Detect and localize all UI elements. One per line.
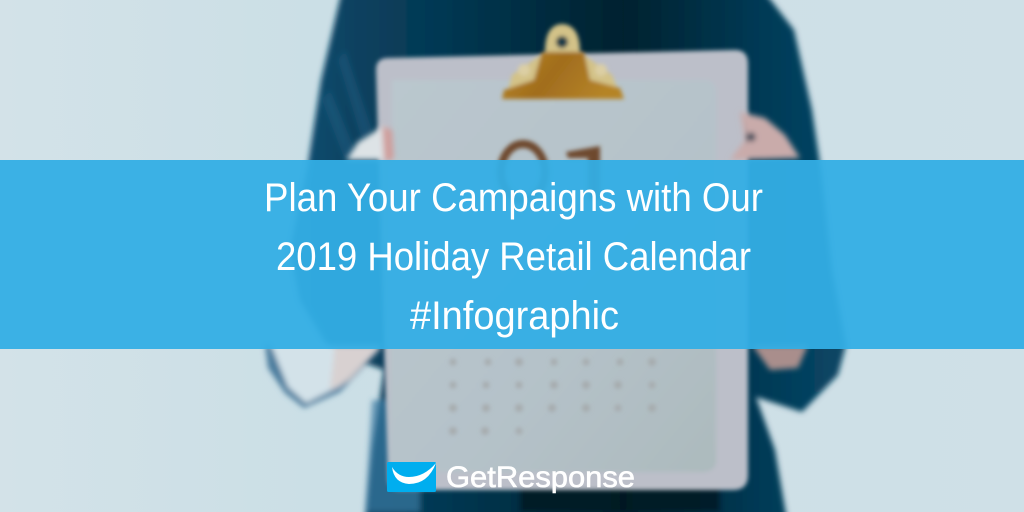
title text: 2019 Holiday Retail Calendar <box>276 235 751 279</box>
clipboard board <box>376 50 748 490</box>
title text: #Infographic <box>410 294 619 338</box>
GetResponse logo <box>387 461 635 494</box>
gold binder clip <box>502 24 624 99</box>
hands <box>346 112 800 160</box>
lower right hand under band <box>752 345 808 370</box>
icon: smile envelope <box>387 462 436 492</box>
calendar date dots <box>449 358 656 435</box>
title text <box>264 176 763 338</box>
blue title band <box>0 160 1024 349</box>
sweater torso and sleeves <box>290 0 846 512</box>
title text: Plan Your Campaigns with Our <box>264 176 763 220</box>
left bare arm <box>265 345 382 408</box>
calendar numeral 01 blurred <box>501 144 600 200</box>
logo wordmark: GetResponse <box>446 461 635 494</box>
